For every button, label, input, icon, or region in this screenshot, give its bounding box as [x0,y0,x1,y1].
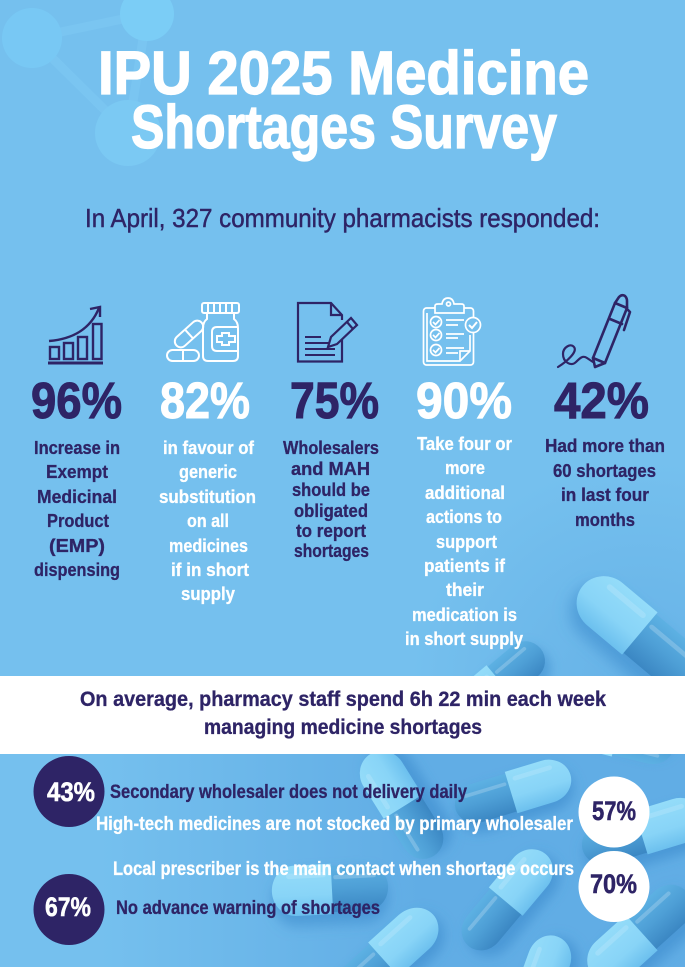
description: their [446,579,484,600]
description: (EMP) [49,535,105,556]
description: if in short [171,559,249,580]
description: should be [292,479,370,500]
description: 60 shortages [553,460,656,481]
description: and MAH [291,458,370,479]
percentage: 96% [31,372,122,429]
description [159,437,256,604]
capsules: upper section [470,570,685,676]
description: actions to [426,506,502,527]
stat: 43% secondary wholesaler: Secondary wholesaler does not delivery daily [110,782,467,803]
description: shortages [294,540,369,561]
stat: 67% no advance warning [34,874,380,945]
description: to report [296,520,366,541]
icon: clipboard checklist [424,298,480,365]
stat: 70% local prescriber: 70% [590,869,637,899]
description: additional [425,482,505,503]
title: IPU 2025 Medicine [98,39,589,107]
stat: 70% local prescriber [113,851,650,922]
description [545,435,665,530]
panel: 96% stat [31,307,122,580]
icon: document and pen [298,303,357,362]
stat: 67% no advance warning: 67% [45,892,91,922]
percentage: 75% [290,372,379,429]
capsules: lower section [0,754,685,967]
description: supply [181,583,236,604]
description: generic [179,461,237,482]
description: dispensing [34,559,120,580]
stat: 43% secondary wholesaler: 43% [47,777,95,807]
icon: rising bar chart [48,307,103,363]
percentage: 42% [554,372,649,429]
description: support [436,531,497,552]
panel: 42% stat [545,295,665,530]
white band callout: managing medicine shortages [204,715,482,739]
description [283,437,379,561]
stat: 57% high-tech medicines: High-tech medicines are not stocked by primary wholesaler [96,814,574,835]
panel: 82% stat [159,303,256,604]
description: patients if [424,555,506,576]
description: more [445,457,485,478]
description: obligated [294,500,368,521]
panel: 75% stat [283,303,379,561]
title [98,39,589,161]
description: Exempt [46,461,108,482]
stat: 67% no advance warning: No advance warning of shortages [116,898,380,919]
description [405,433,524,649]
description: Product [47,510,109,531]
description: Take four or [417,433,512,454]
percentage: 82% [160,372,250,429]
description: medication is [412,604,517,625]
description: Wholesalers [283,437,379,458]
white band callout [0,676,685,754]
stat: 57% high-tech medicines [96,776,650,848]
description: on all [187,510,229,531]
icon: medicine bottle and pills [167,303,239,361]
description [34,437,120,580]
title: Shortages Survey [131,93,557,161]
description: months [575,509,635,530]
subtitle: In April, 327 community pharmacists responded: [85,203,600,233]
molecule decoration [2,0,174,166]
panel: 90% stat [405,298,524,649]
description: Increase in [34,437,120,458]
white band callout: On average, pharmacy staff spend 6h 22 min each week [80,687,606,711]
percentage: 90% [416,372,512,429]
description: in short supply [405,628,524,649]
stat: 70% local prescriber: Local prescriber is the main contact when shortage occurs [113,859,574,880]
description: medicines [169,535,248,556]
icon: pen and signature [558,295,630,367]
description: Had more than [545,435,665,456]
description: Medicinal [37,486,117,507]
description: in last four [561,484,649,505]
stat: 43% secondary wholesaler [34,756,467,827]
description: in favour of [163,437,255,458]
description: substitution [159,486,256,507]
stat: 57% high-tech medicines: 57% [592,796,636,826]
